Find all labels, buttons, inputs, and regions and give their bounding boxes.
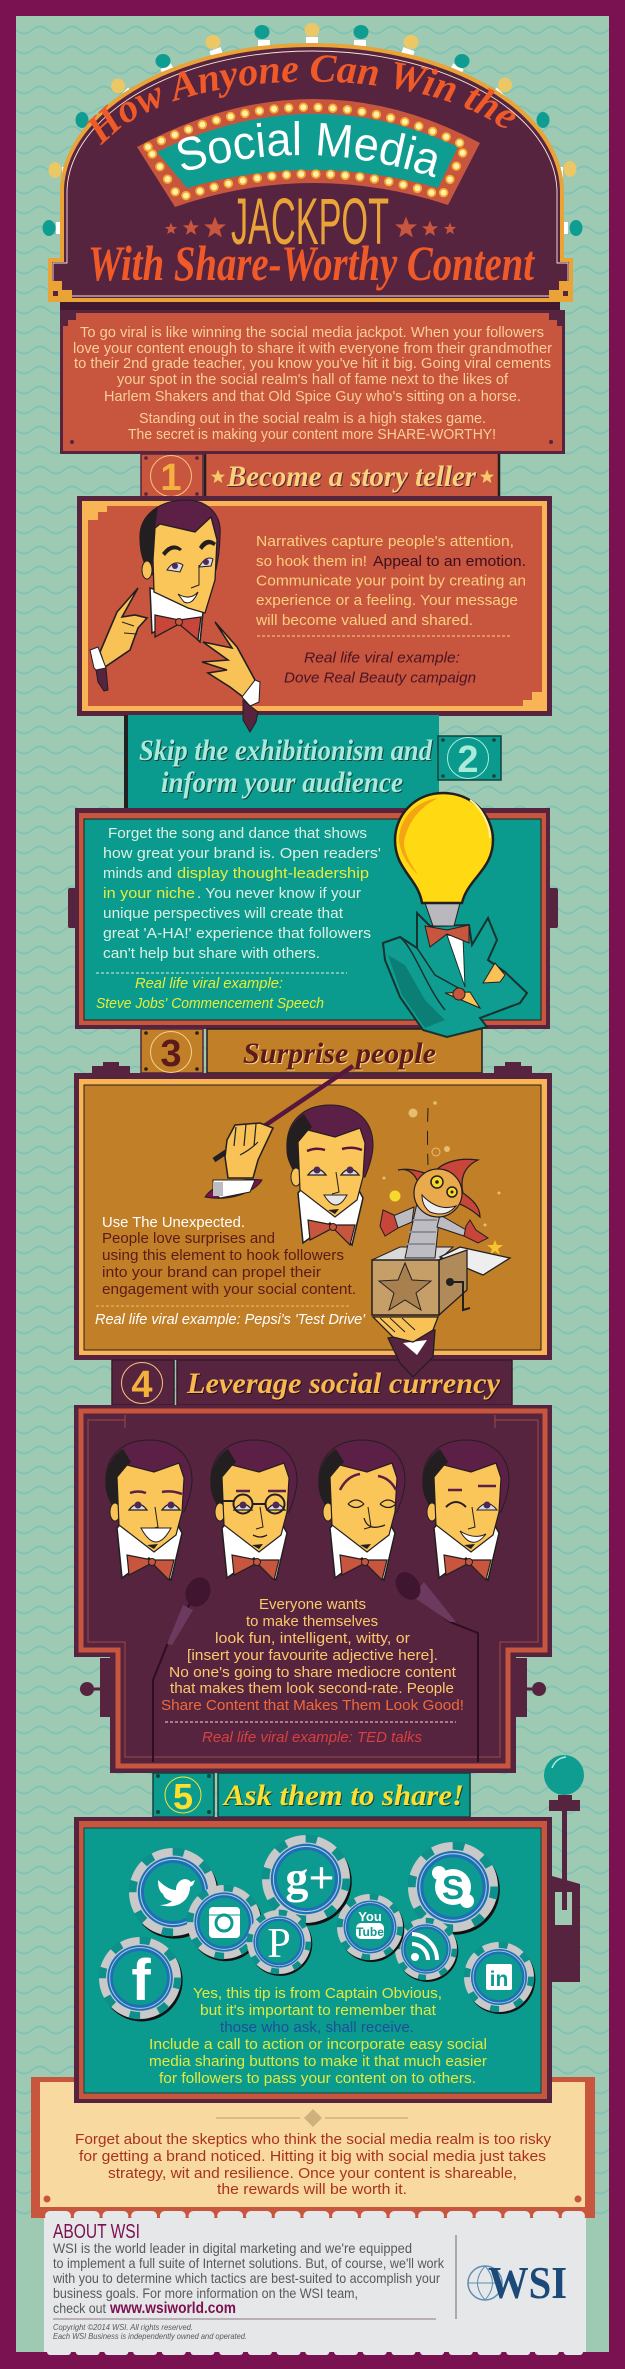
cuff — [205, 1180, 262, 1198]
inform text: unique perspectives will create that — [103, 905, 344, 922]
surprise text: engagement with your social content. — [102, 1281, 356, 1298]
copyright — [53, 2323, 247, 2341]
head: winking — [423, 1440, 509, 1580]
marquee dots — [148, 107, 466, 198]
number 3: 3 — [160, 1033, 182, 1075]
WSI logo: WSI — [488, 2257, 567, 2308]
chip: skype: S — [442, 1869, 464, 1906]
closing text: the rewards will be worth it. — [217, 2181, 407, 2198]
chip: facebook: f — [131, 1948, 151, 2013]
right hand — [202, 622, 255, 700]
intro text: to their 2nd grade teacher, you know you've hit it big. Going viral cements — [74, 355, 551, 372]
figure: lightbulb man — [383, 793, 527, 1037]
story text — [255, 533, 526, 686]
inform text: Steve Jobs' Commencement Speech — [96, 995, 324, 1012]
sparkles — [382, 1101, 500, 1226]
currency text: that makes them look second-rate. People — [170, 1680, 454, 1697]
panel: intro — [60, 310, 565, 454]
arms — [393, 1207, 468, 1236]
section 2 heading — [124, 715, 501, 808]
box front — [372, 1260, 439, 1315]
box side — [439, 1250, 467, 1315]
surprise text: into your brand can propel their — [102, 1264, 321, 1281]
chip: rss — [395, 1918, 458, 1982]
chip: linkedin — [464, 1942, 535, 2014]
share text: media sharing buttons to make it that much easier — [149, 2053, 487, 2070]
story text: so hook them in! — [256, 553, 367, 570]
story text: Communicate your point by creating an — [256, 572, 526, 590]
panel: surprise — [74, 1062, 552, 1360]
intro text: Standing out in the social realm is a high stakes game. — [139, 410, 486, 427]
story text: Real life viral example: — [304, 650, 460, 666]
box lid — [440, 1247, 510, 1275]
about text: business goals. For more information on the WSI team, — [53, 2285, 358, 2301]
panel: story teller — [77, 496, 552, 716]
share text: Yes, this tip is from Captain Obvious, — [193, 1985, 442, 2002]
number 5: 5 — [173, 1776, 193, 1817]
title line 2: Social Media — [178, 121, 437, 178]
currency text: No one's going to share mediocre content — [169, 1664, 457, 1681]
section 2 heading: inform your audience — [161, 766, 403, 799]
title line 3: JACKPOT — [231, 184, 389, 258]
surprise text: Real life viral example: Pepsi's 'Test Drive' — [95, 1311, 366, 1328]
collar — [150, 588, 203, 642]
heading text: Skip the exhibitionism and — [139, 734, 433, 767]
chip: linkedin: in — [490, 1968, 508, 1991]
section 5 heading — [153, 1773, 470, 1817]
about text: to implement a full suite of Internet solutions. But, of course, we'll work — [53, 2255, 445, 2271]
ornament divider — [216, 2109, 408, 2127]
heading text: Leverage social currency — [186, 1367, 501, 1400]
inform text: great 'A-HA!' experience that followers — [103, 925, 371, 942]
intro text — [73, 324, 552, 443]
slot machine lever — [544, 1755, 584, 1982]
chip: pinterest — [247, 1910, 312, 1976]
about text: check out — [53, 2300, 106, 2316]
share text: but it's important to remember that — [200, 2002, 437, 2019]
story text: will become valued and shared. — [255, 612, 473, 629]
panel: about WSI: www.wsiworld.com — [109, 2300, 236, 2317]
number 4: 4 — [131, 1364, 153, 1406]
currency text: look fun, intelligent, witty, or — [215, 1630, 410, 1647]
intro text: love your content enough to share it with everyone from their grandmother — [73, 340, 552, 357]
inform text: Forget the song and dance that shows — [108, 825, 367, 842]
about text: with you to determine which tactics are best-suited to accomplish your — [52, 2270, 440, 2286]
jester hat — [398, 1159, 480, 1217]
marquee sign — [42, 23, 582, 310]
chip: google plus — [262, 1835, 352, 1926]
intro text: your spot in the social realm's hall of fame next to the likes of — [117, 371, 509, 388]
head: witty — [319, 1440, 405, 1580]
inform text: . You never know if your — [197, 885, 361, 902]
bow tie — [425, 925, 469, 947]
closing text: Forget about the skeptics who think the social media realm is too risky — [75, 2131, 552, 2148]
surprise text: using this element to hook followers — [102, 1247, 344, 1264]
marquee light bulbs — [42, 23, 582, 236]
number 2: 2 — [457, 739, 479, 781]
heading text: Surprise people — [243, 1037, 436, 1070]
currency text: Everyone wants — [259, 1596, 366, 1613]
section 1 heading — [141, 454, 500, 499]
panel: inform — [68, 808, 558, 1029]
story text: experience or a feeling. Your message — [256, 592, 518, 609]
microphones — [153, 1567, 478, 1762]
chip: youtube: You — [358, 1909, 382, 1924]
inform text: in your niche — [103, 885, 195, 902]
socket — [425, 903, 460, 926]
share text — [149, 1985, 487, 2087]
chip: youtube: Tube — [356, 1925, 384, 1939]
about text: WSI is the world leader in digital marketing and we're equipped — [53, 2240, 412, 2256]
crossed hands — [483, 963, 505, 983]
inform text: minds and — [103, 865, 172, 882]
inform text: display thought-leadership — [177, 865, 369, 882]
share text: those who ask, shall receive. — [220, 2019, 414, 2036]
intro text: To go viral is like winning the social media jackpot. When your followers — [80, 324, 544, 341]
crank — [450, 1282, 470, 1310]
currency text: to make themselves — [246, 1613, 378, 1630]
jacket — [383, 913, 527, 1037]
closing text — [75, 2131, 552, 2198]
marquee board — [137, 99, 480, 207]
arch shadow band — [60, 302, 560, 312]
surprise text: People love surprises and — [102, 1230, 275, 1247]
share text: for followers to pass your content on to others. — [159, 2070, 476, 2087]
chip: youtube — [337, 1894, 404, 1962]
box back — [372, 1247, 453, 1260]
about heading: ABOUT WSI — [53, 2221, 140, 2243]
chip: google plus: g+ — [285, 1852, 335, 1903]
raised hand — [225, 1123, 273, 1178]
story text: Dove Real Beauty campaign — [284, 670, 476, 686]
chip: pinterest: P — [267, 1921, 291, 1967]
chip: twitter — [129, 1848, 219, 1939]
sleeve and holding hand — [388, 1330, 435, 1377]
chip: facebook — [99, 1937, 183, 2021]
bulb — [395, 793, 493, 903]
hair — [140, 500, 220, 575]
heading text: Become a story teller — [226, 460, 476, 493]
closing text: strategy, wit and resilience. Once your content is shareable, — [108, 2165, 517, 2182]
about text — [52, 2240, 445, 2316]
currency text: Share Content that Makes Them Look Good! — [161, 1697, 464, 1714]
chips — [99, 1835, 535, 2021]
share text: Include a call to action or incorporate easy social — [149, 2036, 487, 2053]
stars — [165, 216, 456, 237]
heading text: Ask them to share! — [222, 1779, 464, 1812]
story text: Narratives capture people's attention, — [256, 533, 514, 550]
copyright: Each WSI Business is independently owned and operated. — [53, 2332, 247, 2341]
wand — [214, 1066, 353, 1160]
section 3 heading — [141, 1029, 482, 1075]
inform text: can't help but share with others. — [103, 945, 320, 962]
number 1: 1 — [160, 457, 182, 499]
bow tie — [155, 615, 201, 640]
inform text: Real life viral example: — [135, 975, 283, 992]
intro text: The secret is making your content more SHARE-WORTHY! — [128, 426, 496, 443]
chip: skype — [408, 1842, 500, 1935]
intro text: Harlem Shakers and that Old Spice Guy who's sitting on a horse. — [104, 388, 521, 405]
title line 1: How Anyone Can Win the — [86, 55, 516, 146]
currency text — [161, 1596, 464, 1746]
heads — [106, 1440, 509, 1580]
chip: instagram — [187, 1885, 262, 1961]
figure: story teller man — [90, 500, 260, 732]
panel: social currency — [74, 1405, 552, 1773]
section 4 heading — [112, 1360, 512, 1406]
head: fun — [106, 1440, 192, 1580]
inform text — [96, 825, 381, 1012]
left hand — [100, 588, 147, 667]
jester face — [414, 1169, 462, 1217]
face — [153, 517, 217, 613]
panel: share — [74, 1817, 552, 2103]
surprise text — [95, 1214, 366, 1328]
figure: magician with jack in the box — [205, 1066, 510, 1377]
closing panel — [31, 2077, 595, 2218]
inform text: how great your brand is. Open readers' — [103, 845, 381, 862]
currency text: [insert your favourite adjective here]. — [187, 1647, 438, 1664]
panel: about WSI — [44, 2216, 586, 2352]
head: intelligent — [211, 1440, 297, 1580]
copyright: Copyright ©2014 WSI. All rights reserved. — [53, 2323, 193, 2332]
currency text: Real life viral example: TED talks — [202, 1729, 422, 1746]
spring body — [405, 1203, 440, 1258]
arch body — [48, 43, 573, 302]
head — [287, 1105, 373, 1245]
surprise text: Use The Unexpected. — [102, 1214, 245, 1231]
story text: Appeal to an emotion. — [373, 553, 526, 570]
closing text: for getting a brand noticed. Hitting it big with social media just takes — [79, 2148, 546, 2165]
